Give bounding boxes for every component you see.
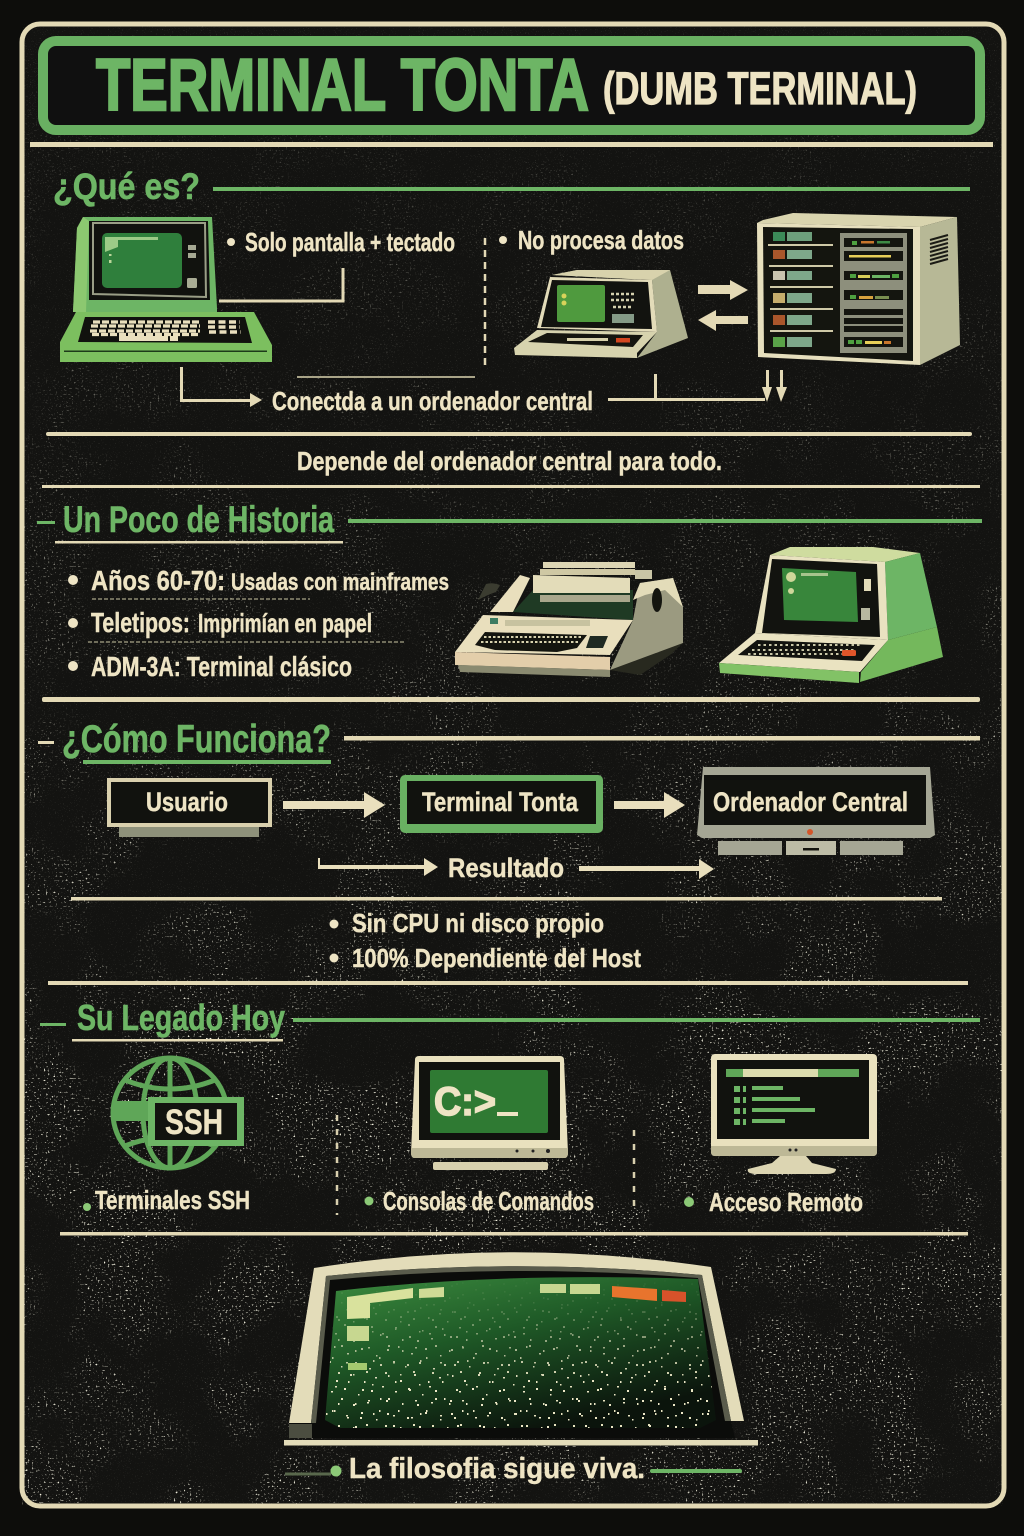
connector: terminal to caption bbox=[180, 367, 262, 407]
section heading: cómo funciona: ¿Cómo Funciona? bbox=[62, 718, 331, 761]
history list: Imprimían en papel bbox=[198, 608, 372, 638]
result flow: Resultado bbox=[448, 853, 564, 883]
connector: caption to server bbox=[608, 370, 787, 402]
label: consolas bbox=[364, 1186, 594, 1216]
bullet list: dependency bbox=[330, 908, 641, 973]
bullet list: dependency: Sin CPU ni disco propio bbox=[352, 908, 604, 938]
text: solo pantalla bbox=[227, 227, 455, 257]
history list bbox=[68, 565, 449, 682]
arrow: to server bbox=[698, 280, 748, 300]
label: acceso remoto bbox=[684, 1187, 863, 1217]
history list: Años 60-70: bbox=[91, 565, 225, 596]
connector: terminal to text bbox=[219, 268, 343, 301]
illustration: large CRT screen bbox=[284, 1252, 758, 1446]
icon: small beige terminal bbox=[514, 270, 688, 358]
icon: SSH globe bbox=[113, 1058, 244, 1168]
bullet list: dependency: 100% Dependiente del Host bbox=[352, 943, 641, 973]
icon: remote access monitor bbox=[711, 1054, 877, 1174]
flow box: usuario bbox=[109, 780, 270, 837]
closing line bbox=[285, 1453, 742, 1485]
icon: command console monitor bbox=[411, 1056, 568, 1170]
flow box: terminal tonta bbox=[400, 775, 603, 833]
arrow: from server bbox=[698, 310, 748, 331]
history list: Teletipos: bbox=[91, 607, 190, 638]
flow box: terminal tonta: Terminal Tonta bbox=[422, 787, 579, 817]
icon: command console monitor: C:> bbox=[434, 1080, 496, 1124]
section heading: legado: Su Legado Hoy bbox=[77, 997, 285, 1038]
flow box: usuario: Usuario bbox=[146, 787, 228, 817]
icon: teletype printer bbox=[455, 562, 683, 677]
arrow bbox=[614, 792, 685, 818]
icon: ADM-3A terminal bbox=[719, 547, 943, 683]
text: depende: Depende del ordenador central para todo. bbox=[297, 446, 722, 476]
section heading: Qué es bbox=[53, 166, 970, 207]
section heading: legado bbox=[40, 997, 980, 1042]
heading: subtitle: (DUMB TERMINAL) bbox=[603, 63, 917, 114]
label: consolas: Consolas de Comandos bbox=[383, 1186, 594, 1216]
title banner bbox=[43, 41, 980, 130]
result flow bbox=[318, 853, 714, 883]
icon: green terminal with keyboard bbox=[60, 217, 272, 362]
icon: SSH globe: SSH bbox=[165, 1103, 223, 1142]
flow box: ordenador central: Ordenador Central bbox=[713, 787, 908, 817]
section heading: Qué es: ¿Qué es? bbox=[53, 166, 200, 207]
label: acceso remoto: Acceso Remoto bbox=[709, 1187, 863, 1217]
text: solo pantalla: Solo pantalla + tectado bbox=[245, 227, 455, 257]
section heading: historia: Un Poco de Historia bbox=[63, 499, 334, 540]
section heading: cómo funciona bbox=[38, 718, 980, 764]
section heading: historia bbox=[37, 499, 982, 544]
closing line: La filosofia sigue viva. bbox=[349, 1453, 645, 1485]
history list: ADM-3A: Terminal clásico bbox=[91, 651, 352, 682]
flow box: ordenador central bbox=[697, 767, 935, 855]
history list: Usadas con mainframes bbox=[231, 569, 449, 596]
icon: central computer server bbox=[757, 213, 960, 365]
heading: main title: TERMINAL TONTA bbox=[96, 45, 589, 126]
arrow bbox=[283, 792, 385, 818]
label: terminales SSH: Terminales SSH bbox=[95, 1185, 250, 1215]
text: no procesa datos bbox=[499, 225, 684, 255]
text: no procesa datos: No procesa datos bbox=[518, 225, 684, 255]
text: conecta: Conectda a un ordenador central bbox=[272, 386, 593, 416]
